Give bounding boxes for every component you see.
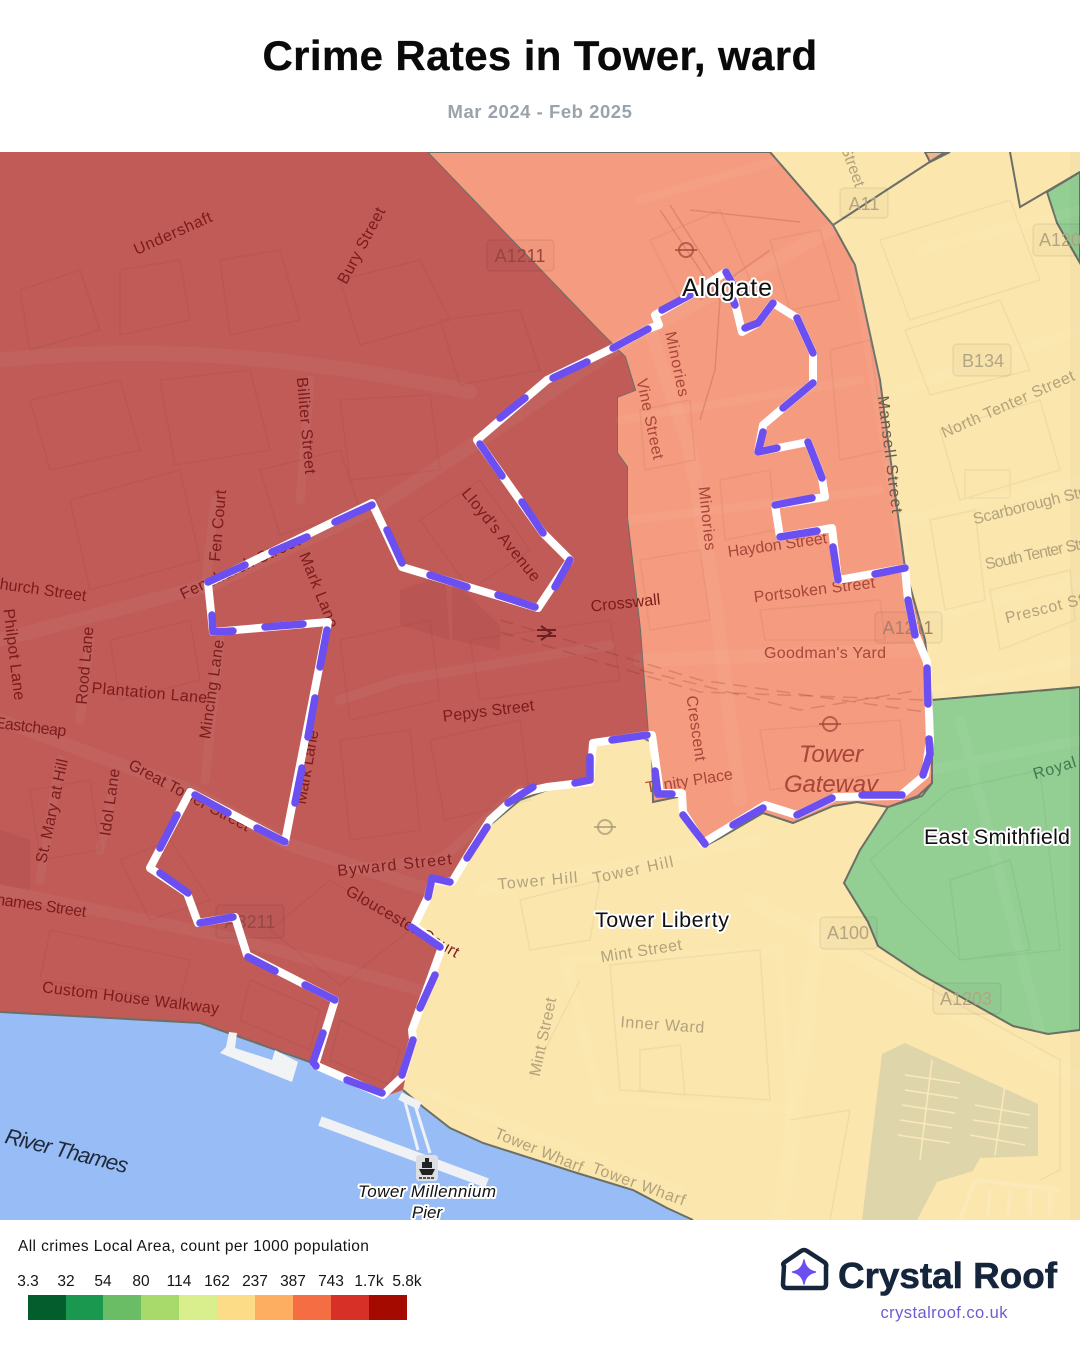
roads layer bbox=[0, 160, 1080, 1220]
buildings outlines layer bbox=[20, 200, 1075, 1220]
shield labels bbox=[225, 194, 1080, 1009]
legend tick labels: 80 bbox=[132, 1273, 150, 1290]
tower gateway label: Tower bbox=[799, 741, 864, 768]
street labels on dark red: Mark Lane bbox=[295, 550, 341, 631]
street labels on yellow: Tower Hill bbox=[591, 854, 675, 887]
street labels on dark red: St. Mary at Hill bbox=[33, 757, 72, 865]
street labels on yellow bbox=[492, 143, 1080, 1210]
street labels on dark red: Mincing Lane bbox=[197, 639, 228, 740]
street labels on salmon: Haydon Street bbox=[727, 530, 829, 561]
street labels on dark red: Philpot Lane bbox=[0, 608, 28, 701]
region: green east smithfield bbox=[844, 687, 1080, 1034]
legend tick labels: 387 bbox=[280, 1273, 306, 1290]
street labels on yellow: Tower Wharf bbox=[590, 1160, 688, 1210]
legend scale bbox=[17, 1273, 422, 1320]
legend tick labels: 5.8k bbox=[392, 1273, 422, 1290]
royal label: Royal bbox=[1031, 754, 1078, 783]
tube roundels bbox=[594, 243, 841, 834]
legend tick labels: 32 bbox=[57, 1273, 75, 1290]
rail station icon bbox=[537, 626, 556, 640]
legend bbox=[17, 1238, 422, 1320]
street labels on salmon: Crescent bbox=[682, 695, 709, 763]
street labels on yellow: Mint Street bbox=[527, 996, 560, 1078]
region: green top right bbox=[1047, 172, 1080, 263]
street labels on dark red: Fenchurch Street bbox=[178, 533, 303, 603]
place labels with white halo bbox=[358, 274, 1070, 1222]
darker building blocks bbox=[0, 575, 500, 890]
street labels on salmon: Minories bbox=[661, 330, 692, 398]
shield labels: A1203 bbox=[940, 989, 992, 1009]
legend tick labels: 237 bbox=[242, 1273, 268, 1290]
tower gateway label: Gateway bbox=[784, 771, 880, 798]
street labels on dark red: Billiter Street bbox=[293, 377, 318, 475]
shield labels: A1211 bbox=[495, 246, 545, 266]
street labels on salmon: Minories bbox=[695, 486, 718, 551]
street labels on yellow: Mint Street bbox=[599, 937, 684, 966]
region: salmon portsoken bbox=[427, 152, 932, 846]
river thames label: River Thames bbox=[3, 1123, 131, 1178]
website url: crystalroof.co.uk bbox=[880, 1304, 1008, 1322]
street labels on dark red: Plantation Lane bbox=[91, 680, 208, 707]
street labels on dark red: Crosswall bbox=[590, 591, 661, 616]
marina pontoons bbox=[898, 1060, 1060, 1220]
marina bbox=[862, 1043, 1038, 1220]
street labels on salmon: Portsoken Street bbox=[753, 575, 877, 606]
shield labels: A3211 bbox=[225, 912, 275, 932]
street labels on dark red: Lloyd's Avenue bbox=[458, 485, 543, 585]
legend colour bar bbox=[28, 1295, 407, 1320]
street labels on dark red: Rood Lane bbox=[74, 626, 97, 705]
street labels on dark red: Byward Street bbox=[336, 851, 453, 880]
region: dark red city bbox=[0, 152, 648, 1097]
river thames water bbox=[0, 1012, 693, 1220]
legend tick labels: 1.7k bbox=[354, 1273, 384, 1290]
street labels on dark red: Pepys Street bbox=[442, 697, 536, 726]
place labels with white halo: Tower Millennium bbox=[358, 1182, 496, 1201]
right edge shade bbox=[1070, 152, 1080, 1220]
street labels on dark red: Gloucester Court bbox=[343, 883, 462, 962]
brand name: Crystal Roof bbox=[838, 1255, 1058, 1296]
shield labels: A1211 bbox=[883, 618, 933, 638]
street labels on salmon: Trinity Place bbox=[645, 766, 734, 797]
street labels on yellow: North Tenter Street bbox=[939, 368, 1078, 442]
icon: house with star bbox=[783, 1250, 826, 1288]
railway tracks bbox=[500, 620, 1080, 712]
street labels on dark red: Great Tower Street bbox=[126, 757, 253, 835]
street labels on dark red: Idol Lane bbox=[97, 767, 124, 837]
subtitle: date range: Mar 2024 - Feb 2025 bbox=[448, 101, 632, 122]
street labels on yellow: Inner Ward bbox=[620, 1014, 705, 1037]
street labels on dark red: Custom House Walkway bbox=[41, 979, 220, 1018]
place labels with white halo: Tower Liberty bbox=[595, 908, 729, 932]
pier walkways and pontoon bbox=[320, 1096, 487, 1183]
tower gateway label bbox=[784, 741, 880, 798]
legend title: All crimes Local Area, count per 1000 population bbox=[18, 1238, 369, 1255]
mansell street label: Mansell Street bbox=[874, 395, 905, 515]
region: small salmon patch top bbox=[925, 152, 950, 162]
boundary lines bbox=[0, 152, 1080, 1220]
street labels on dark red: Fen Court bbox=[207, 488, 230, 562]
legend tick labels: 3.3 bbox=[17, 1273, 39, 1290]
legend tick labels: 743 bbox=[318, 1273, 344, 1290]
road shields bbox=[216, 188, 1080, 1014]
street labels on dark red: Undershaft bbox=[131, 209, 215, 259]
street labels on yellow: Tower Wharf bbox=[492, 1125, 586, 1177]
map bbox=[0, 152, 1080, 1220]
street labels on dark red: Bury Street bbox=[335, 204, 390, 287]
legend tick labels bbox=[17, 1273, 422, 1290]
ward outline: tower bbox=[150, 272, 930, 1095]
street labels on dark red: Mark Lane bbox=[293, 729, 322, 806]
street labels on salmon: Vine Street bbox=[633, 377, 666, 461]
street labels on salmon bbox=[633, 330, 886, 797]
street labels on salmon: Goodman's Yard bbox=[764, 645, 886, 662]
shield labels: A100 bbox=[827, 923, 869, 943]
legend tick labels: 162 bbox=[204, 1273, 230, 1290]
aldgate rail lines bbox=[660, 205, 800, 420]
street labels on dark red bbox=[0, 204, 661, 1018]
region: yellow base area bbox=[0, 152, 1080, 1220]
legend tick labels: 114 bbox=[167, 1273, 192, 1290]
street labels on yellow: Tower Hill bbox=[497, 870, 578, 893]
shield labels: B134 bbox=[962, 351, 1004, 371]
title: Crime Rates in Tower, ward bbox=[262, 32, 818, 79]
brand logo bbox=[780, 1248, 1058, 1322]
shield labels: A120 bbox=[1039, 230, 1080, 250]
place labels with white halo: East Smithfield bbox=[924, 825, 1070, 849]
place labels with white halo: Aldgate bbox=[682, 274, 772, 302]
shield labels: A11 bbox=[849, 194, 879, 214]
legend tick labels: 54 bbox=[94, 1273, 112, 1290]
icon: ferry bbox=[416, 1155, 438, 1181]
white jetty bbox=[220, 1032, 298, 1082]
